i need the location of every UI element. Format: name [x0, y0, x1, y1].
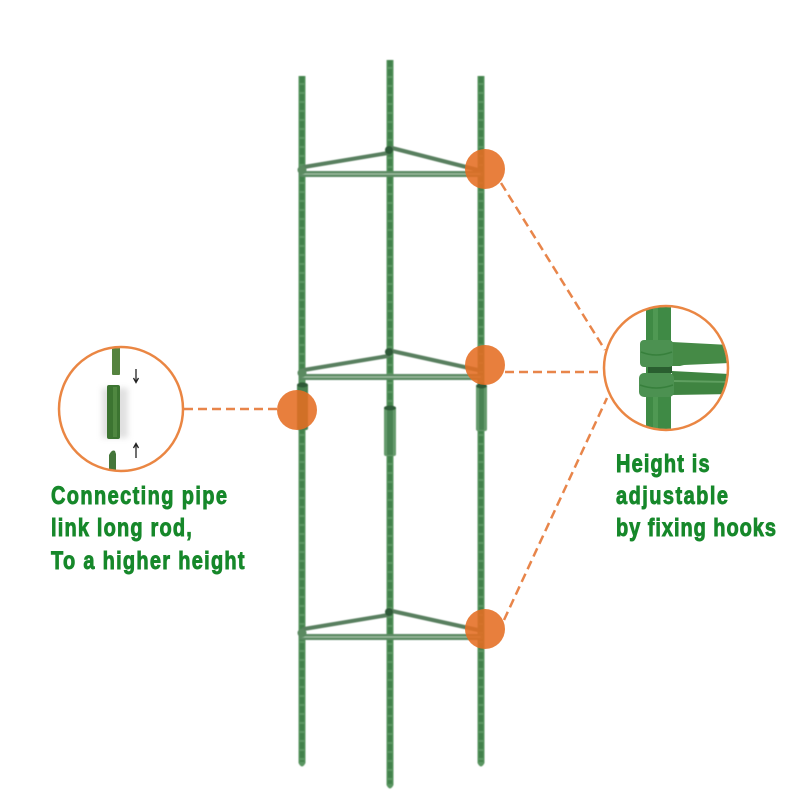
upper rod piece — [112, 345, 120, 375]
caption: fixing hooks: by fixing hooks — [616, 514, 776, 542]
upper arm — [672, 342, 730, 366]
caption: connecting pipe: Connecting pipe — [51, 482, 227, 510]
lower clip — [639, 373, 674, 397]
shadow behind pipe — [102, 388, 128, 438]
highlight dot: top hook — [465, 149, 505, 189]
highlight dot: middle hook — [465, 345, 505, 385]
rod: right — [478, 76, 484, 766]
caption: connecting pipe — [51, 482, 245, 575]
connector tube: left — [297, 382, 308, 430]
connector tube: middle — [384, 406, 396, 456]
ring: middle — [298, 348, 480, 378]
dashed connector: middle dot to right lens — [505, 371, 604, 373]
dashed connector: bottom dot to right lens — [504, 398, 607, 620]
caption: fixing hooks: adjustable — [616, 482, 728, 510]
rod: middle — [386, 60, 394, 788]
highlight dot: connecting pipe — [277, 390, 317, 430]
ring: top — [298, 146, 480, 174]
caption: connecting pipe: link long rod, — [51, 514, 192, 542]
rod: left — [298, 76, 306, 766]
detail lens: connecting pipe — [59, 345, 183, 472]
connecting pipe piece — [107, 385, 120, 439]
dashed connector: pipe dot to left lens — [184, 408, 277, 410]
vertical rod — [646, 307, 671, 429]
dashed connector: top dot to right lens — [501, 183, 605, 350]
arrow: down — [134, 369, 138, 382]
plant support frame — [297, 60, 487, 788]
arrow: up — [134, 444, 138, 458]
ring: bottom — [298, 608, 480, 638]
caption: fixing hooks: Height is — [616, 450, 710, 478]
upper clip — [640, 340, 673, 367]
highlight dot: bottom hook — [465, 609, 505, 649]
connector tube: right — [476, 384, 487, 431]
lower arm — [672, 371, 730, 395]
detail lens: fixing hooks — [604, 300, 730, 440]
lower rod piece — [109, 450, 116, 470]
caption: connecting pipe: To a higher height — [51, 547, 245, 575]
caption: fixing hooks — [616, 450, 776, 542]
